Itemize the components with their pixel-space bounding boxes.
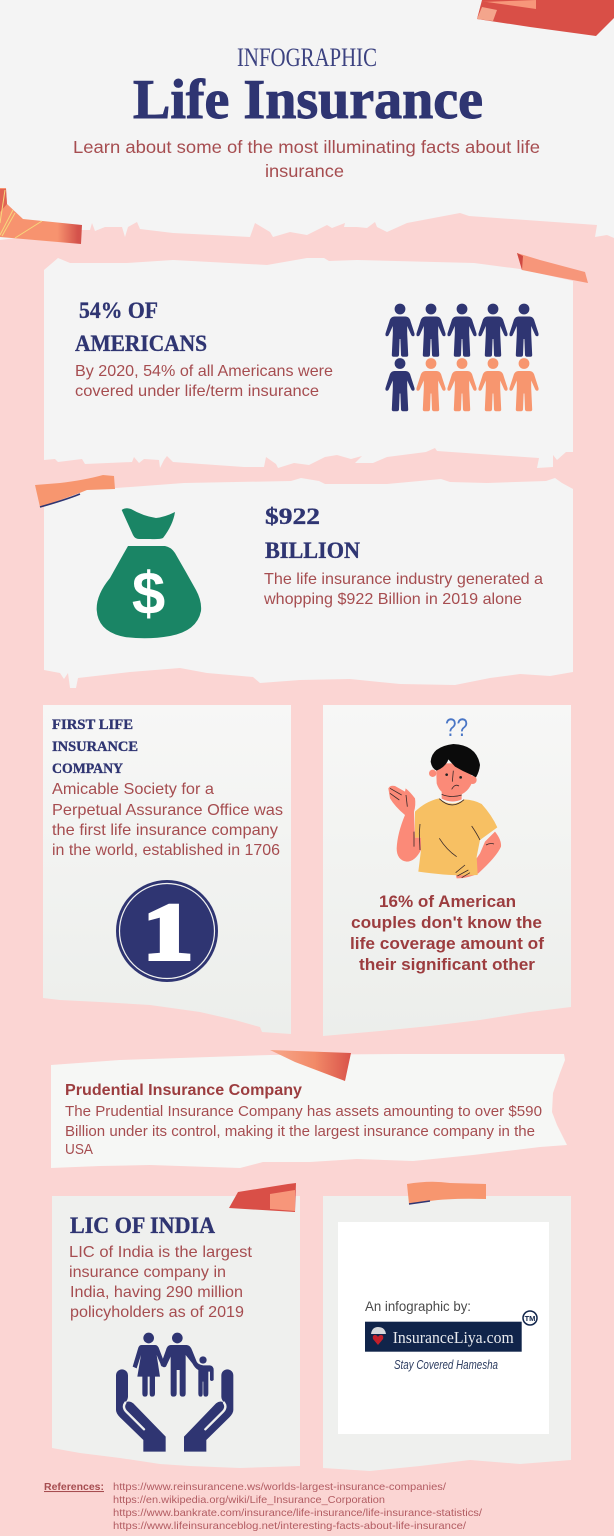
panel: 54% of Americans [44, 253, 588, 468]
icon: question marks: ?? [445, 714, 468, 742]
text: 16% of American couples [350, 893, 545, 974]
text: Amicable Society [52, 781, 283, 859]
text: LIC of India [69, 1244, 253, 1321]
heading: Prudential: Prudential Insurance Company [65, 1082, 302, 1099]
references [44, 1481, 482, 1532]
panel: first life insurance company [43, 705, 291, 1034]
logo: InsuranceLiya: InsuranceLiya.com [393, 1328, 514, 1347]
illustration: confused person [388, 714, 501, 878]
panel: InsuranceLiya credit [323, 1182, 571, 1471]
text: revenue: whopping $922 Billion in 2019 alone [263, 591, 522, 608]
text: 16% of American couples: their significant other [359, 956, 536, 974]
tagline: Stay Covered Hamesha [394, 1357, 498, 1372]
tape: Prudential [270, 1050, 351, 1081]
text: revenue: The life insurance industry generated a [264, 571, 543, 588]
tape: top left [0, 188, 82, 244]
text: 16% of American couples: couples don't know the [351, 914, 542, 932]
text: Prudential assets: Billion under its control, making it the largest insurance company in the [65, 1123, 535, 1140]
subtitle [73, 137, 540, 181]
text: LIC of India: LIC of India is the largest [69, 1244, 253, 1261]
text: Americans covered [75, 363, 333, 400]
heading: $922 billion: BILLION [265, 538, 360, 563]
text: Americans covered: By 2020, 54% of all Americans were [75, 363, 333, 380]
title: Life Insurance [133, 69, 483, 131]
text: Amicable Society: the first life insurance company [52, 822, 278, 839]
text: Amicable Society: Perpetual Assurance Office was [52, 802, 283, 819]
heading: first life insurance company [52, 717, 138, 777]
text: revenue [263, 571, 543, 608]
text: LIC of India: India, having 290 million [70, 1284, 243, 1301]
reference links: https://www.reinsurancene.ws/worlds-largest-insurance-companies/ [113, 1481, 446, 1493]
heading: 54% of Americans: 54% OF [79, 298, 158, 323]
text: Amicable Society: in the world, established in 1706 [52, 842, 280, 859]
panel: LIC of India [52, 1183, 300, 1468]
text: an infographic by: An infographic by: [365, 1298, 471, 1314]
reference links: https://en.wikipedia.org/wiki/Life_Insurance_Corporation [113, 1494, 385, 1506]
reference links [113, 1481, 482, 1532]
icon: number one badge: 1 [143, 889, 193, 977]
text: Amicable Society: Amicable Society for a [52, 781, 214, 798]
panel: $922 billion [35, 475, 573, 688]
heading: LIC of India: LIC OF INDIA [70, 1213, 215, 1238]
white card [338, 1222, 549, 1434]
tape: LIC [229, 1183, 296, 1212]
heading: infographic: INFOGRAPHIC [237, 43, 377, 72]
icon: number one badge [116, 880, 218, 982]
figure [388, 744, 501, 878]
references label: References: [44, 1481, 104, 1493]
icon: money bag [97, 508, 201, 638]
reference links: https://www.lifeinsuranceblog.net/interesting-facts-about-life-insurance/ [113, 1520, 466, 1532]
heading: $922 billion: $922 [265, 504, 320, 529]
text: LIC of India: insurance company in [69, 1264, 226, 1281]
tape: credit [407, 1182, 486, 1204]
badge: trademark: TM [525, 1314, 535, 1323]
heading: 54% of Americans [75, 298, 207, 356]
text: 16% of American couples: life coverage amount of [350, 935, 545, 953]
text: Prudential assets [65, 1103, 542, 1158]
icon: umbrella and heart [371, 1327, 386, 1345]
tape: top right [477, 0, 614, 36]
subtitle: insurance [265, 161, 344, 181]
text: Americans covered: covered under life/term insurance [75, 383, 319, 400]
subtitle: Learn about some of the most illuminating facts about life [73, 137, 540, 157]
logo: InsuranceLiya [365, 1311, 537, 1352]
panel: Prudential [51, 1050, 567, 1168]
heading: 54% of Americans: AMERICANS [75, 331, 207, 356]
text: LIC of India: policyholders as of 2019 [70, 1304, 244, 1321]
panel: header [0, 0, 614, 244]
icon: family in hands [116, 1333, 233, 1452]
icon: dollar sign: $ [132, 560, 165, 627]
panel: American couples [323, 705, 571, 1036]
text: Prudential assets: The Prudential Insurance Company has assets amounting to over $590 [65, 1103, 542, 1120]
chart: ten people pictogram [385, 304, 539, 411]
tape: panel two [35, 475, 115, 507]
heading: first life insurance company: INSURANCE [52, 739, 138, 755]
badge: trademark [523, 1311, 537, 1325]
tape: panel one [517, 253, 588, 283]
reference links: https://www.bankrate.com/insurance/life-insurance/life-insurance-statistics/ [113, 1507, 482, 1519]
heading: $922 billion [265, 504, 360, 563]
text: Prudential assets: USA [65, 1141, 93, 1158]
heading: first life insurance company: COMPANY [52, 761, 123, 777]
text: 16% of American couples: 16% of American [379, 893, 516, 911]
heading: first life insurance company: FIRST LIFE [52, 717, 133, 733]
